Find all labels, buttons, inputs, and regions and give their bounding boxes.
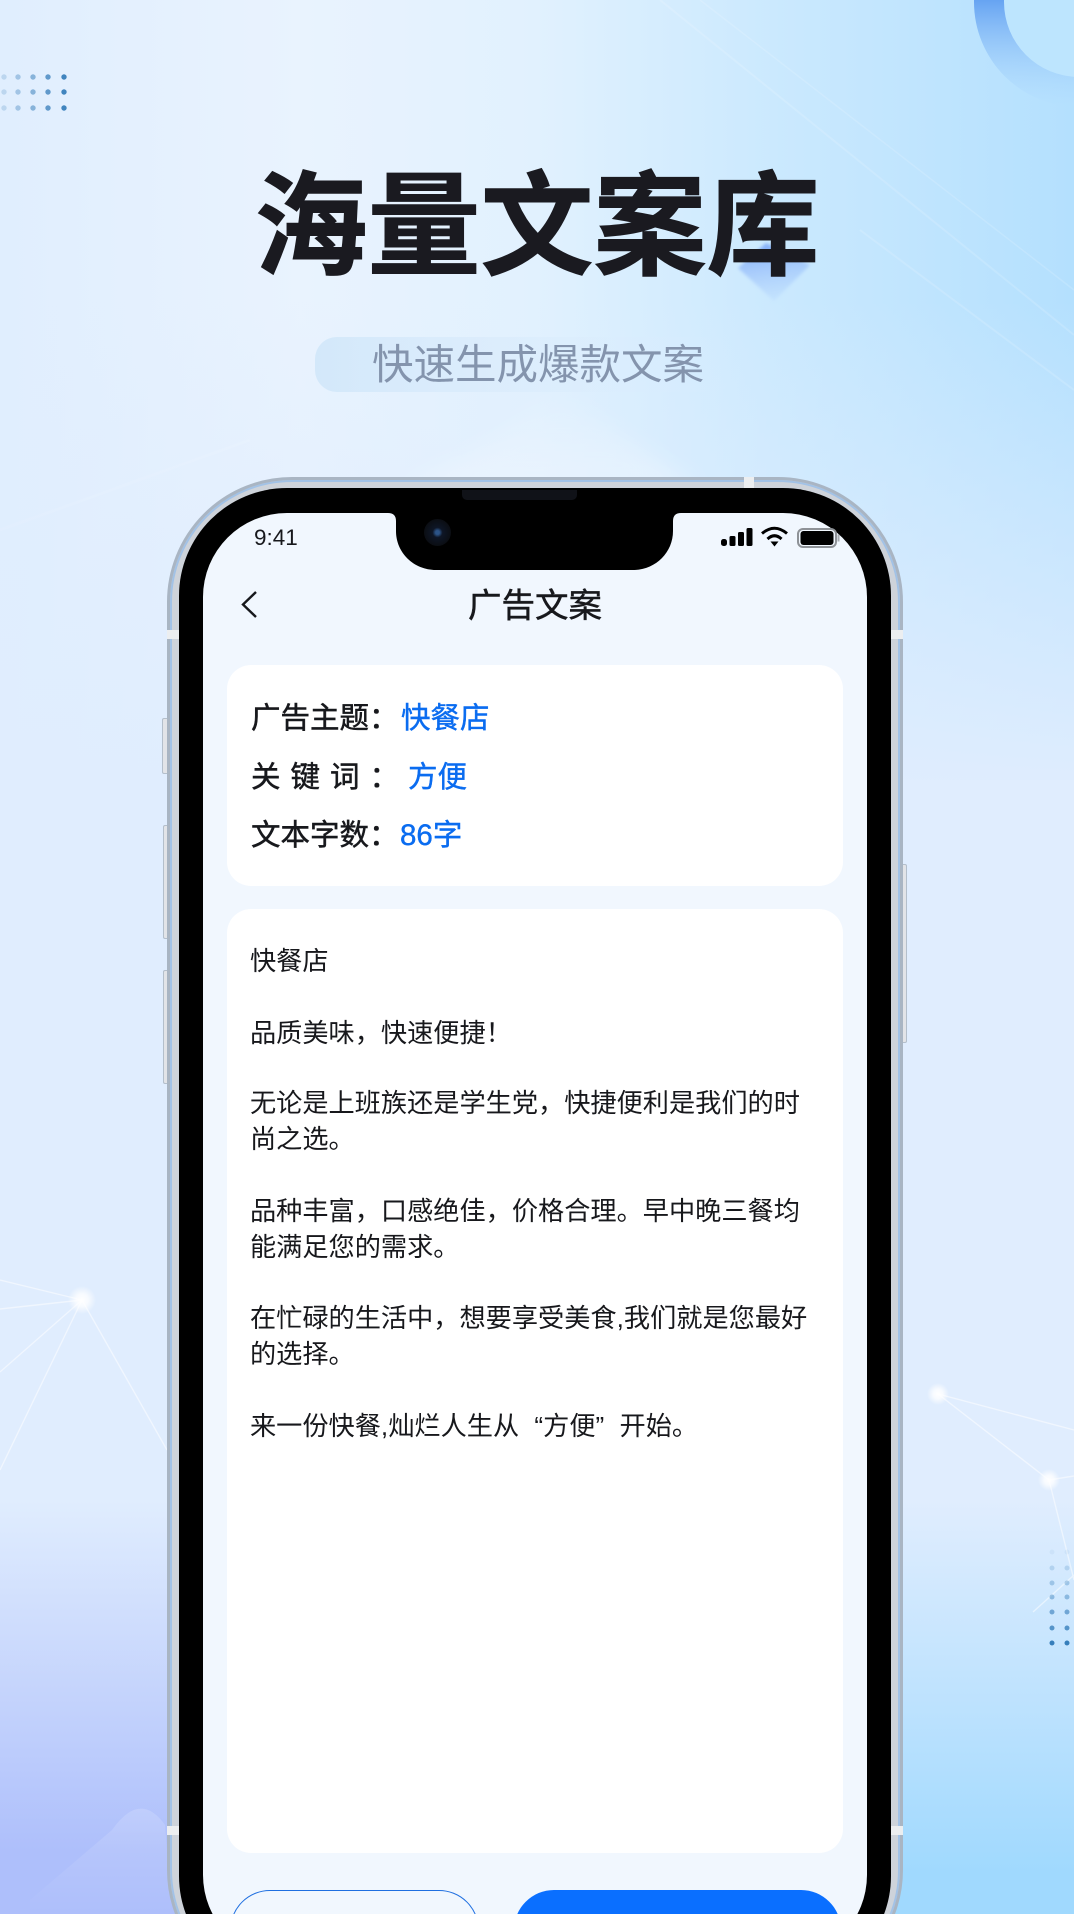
status icons [721,526,840,548]
signal [721,528,752,546]
copy text: 品种丰富，口感绝佳，价格合理。早中晚三餐均 [250,1196,800,1226]
parameter rows: 方便 [408,761,467,794]
bezel [179,488,891,1914]
copy text: 品质美味，快速便捷！ [250,1018,512,1048]
copy text: 能满足您的需求。 [250,1232,460,1262]
copy text: 在忙碌的生活中，想要享受美食,我们就是您最好 [250,1303,807,1333]
panel: ad parameters [227,665,843,886]
copy text: ” [596,1411,604,1441]
dots right [1050,1550,1070,1646]
bottom buttons [233,1890,838,1914]
corner ring [974,0,1074,107]
battery [798,529,840,547]
dots top left [1,74,67,111]
node network left [0,1280,167,1470]
screen title: 广告文案 [468,588,602,625]
parameter rows [251,702,490,852]
copy text: 无论是上班族还是学生党，快捷便利是我们的时 [250,1088,800,1118]
phone frame [167,477,903,1914]
panel: generated copy [227,909,843,1853]
copy text: 来一份快餐,灿烂人生从 方便 开始。 [250,1411,698,1441]
copy text: 尚之选。 [250,1124,355,1154]
parameter rows: 文本字数： [251,819,399,852]
back arrow [241,591,257,618]
frame notches [744,477,754,488]
copy text: “ [534,1411,543,1441]
notch [388,513,680,570]
subtitle pill [315,337,735,392]
parameter rows: 快餐店 [401,702,490,735]
wifi [762,528,787,539]
screen [203,513,867,1914]
side buttons left [162,718,167,774]
parameter rows: 86字 [400,819,462,852]
diamond accent [738,243,810,301]
camera [424,519,451,546]
parameter rows: 关键词： [251,761,409,794]
copy text: 的选择。 [250,1339,355,1369]
copy text: 快餐店 [250,946,329,976]
parameter rows: 广告主题： [251,702,399,735]
button filled [514,1890,841,1914]
copy text [250,946,807,1441]
earpiece [462,490,577,500]
node network right [938,1394,1074,1612]
button outline [230,1890,479,1914]
wifi base [770,542,778,546]
status time: 9:41 [254,525,298,550]
subtitle: 快速生成爆款文案 [372,341,704,388]
side button right [903,864,907,1043]
title: 海量文案库 [254,164,820,290]
